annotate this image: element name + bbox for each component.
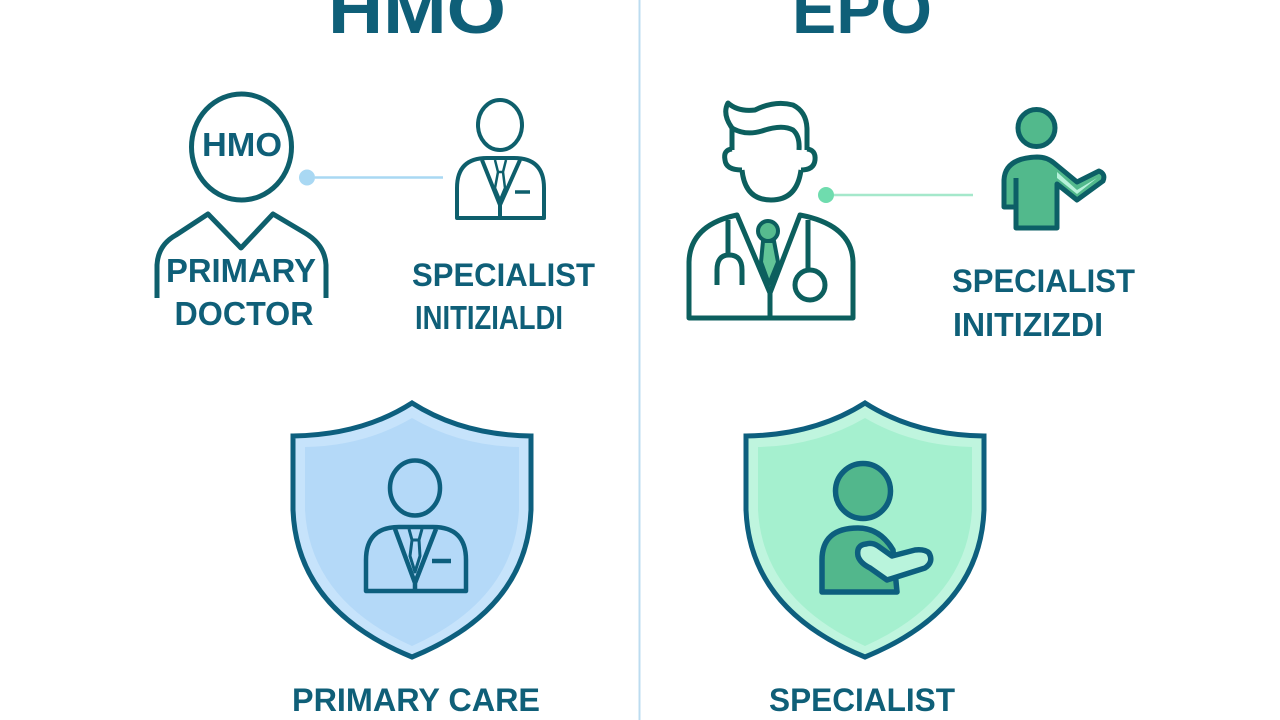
icon: EPO shield person <box>822 464 931 592</box>
label: garbled text left: INITIZIALDI <box>415 299 563 336</box>
shield: EPO <box>746 403 984 657</box>
shield: HMO <box>293 403 531 657</box>
connector: EPO <box>818 187 973 203</box>
icon: EPO specialist <box>1004 110 1104 228</box>
icon: HMO specialist <box>457 100 544 218</box>
label: EPO specialist: SPECIALIST <box>952 263 1135 299</box>
label: primary doctor: PRIMARY <box>166 252 316 289</box>
icon: HMO shield person <box>366 460 466 591</box>
label: specialist: SPECIALIST <box>412 257 595 293</box>
icon: HMO primary doctor <box>157 94 326 298</box>
label: garbled text right: INITIZIZDI <box>953 306 1103 343</box>
label: doctor: DOCTOR <box>174 295 314 332</box>
label: primary care: PRIMARY CARE <box>292 682 540 718</box>
connector: HMO <box>299 170 443 186</box>
icon: EPO doctor <box>689 103 853 318</box>
icon: EPO tie <box>758 221 778 284</box>
label: EPO specialist bottom: SPECIALIST <box>769 682 955 718</box>
label: HMO in head: HMO <box>202 126 282 163</box>
